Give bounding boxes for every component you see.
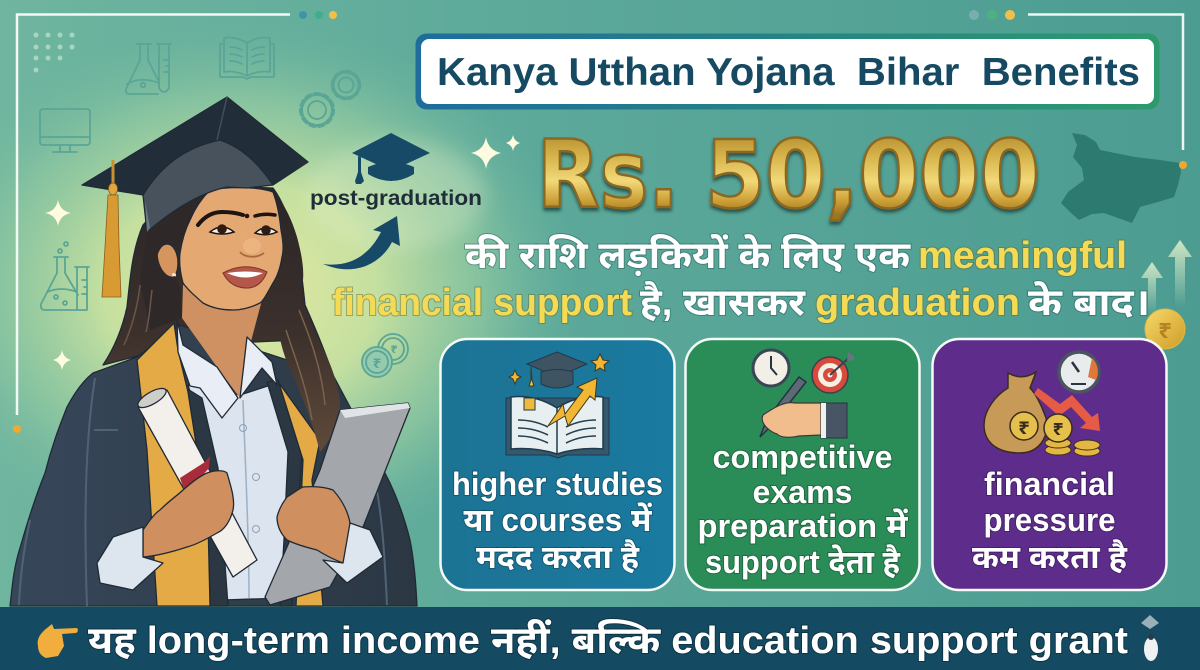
cuff left: [97, 527, 163, 590]
icon: growth arrows: [1141, 240, 1192, 314]
sentence line 1: की राशि लड़कियों के लिए एक: [465, 233, 911, 277]
hand left: [143, 471, 234, 557]
icon: monitor: [40, 109, 90, 152]
face: [180, 188, 283, 310]
post-graduation callout: [306, 133, 486, 269]
right front hair: [273, 190, 340, 452]
card text: support देता है: [705, 544, 901, 580]
neck: [182, 285, 262, 398]
sentence line 2: financial support: [332, 282, 632, 324]
collar left: [177, 320, 238, 418]
amount: Rs. 50,000: [537, 121, 1040, 230]
card text: [972, 466, 1128, 575]
icon: graduate figure: [1141, 615, 1159, 661]
eyes and brows: [198, 212, 243, 225]
card text: कम करता है: [972, 539, 1128, 575]
sentence line 2: है, खासकर: [640, 280, 806, 324]
decorative frame: top right: [969, 10, 1187, 169]
sentence line 1: [465, 233, 1127, 277]
card text: exams: [752, 474, 852, 510]
icon: graduation cap: [352, 133, 430, 184]
buttons: [240, 424, 246, 432]
shirt: [188, 383, 300, 600]
sentence line 2: graduation: [815, 282, 1020, 324]
card text: financial: [984, 466, 1115, 502]
card text: मदद करता है: [476, 539, 640, 575]
icon: flask and test tube, lower: [41, 242, 89, 310]
cap board: [82, 97, 308, 195]
title box: Kanya Utthan Yojana Bihar Benefits: [437, 51, 1140, 94]
gown: [10, 325, 417, 606]
sentence line 2: के बाद।: [1028, 280, 1150, 324]
card text: pressure: [984, 502, 1116, 538]
stole left: [137, 323, 210, 606]
cuff right: [323, 523, 383, 583]
panel: higher studies: [440, 339, 674, 590]
card text: competitive: [712, 439, 892, 475]
title box: [416, 34, 1160, 110]
icon: money bag, gauge and down arrow: ₹: [1018, 417, 1030, 439]
sparkles: [45, 135, 520, 370]
sentence line 2: [332, 280, 1150, 324]
amount: Rs. 50,000: 50,000: [705, 121, 1040, 230]
inner gown facing left: [186, 388, 228, 606]
icon: clock, target and writing hand: [753, 350, 854, 438]
back hair: [103, 186, 340, 450]
icon: open book, top: [220, 38, 274, 79]
icon: Bihar map: [1061, 133, 1181, 223]
icon: pointing hand: [38, 624, 78, 658]
icon: money bag, gauge and down arrow: ₹: [1053, 419, 1063, 440]
icon: flask and test tube, top: [126, 44, 171, 94]
hand right: [277, 487, 350, 563]
card text: [698, 439, 909, 580]
label: post-graduation: post-graduation: [310, 187, 482, 210]
icon: gold rupee coin: ₹: [1158, 317, 1172, 344]
card text: higher studies: [452, 466, 663, 502]
icon: money bag, gauge and down arrow: [984, 352, 1100, 456]
panel: financial pressure: [932, 339, 1166, 590]
card text: preparation में: [698, 508, 909, 544]
bottom banner: [0, 607, 1200, 670]
student illustration: [10, 97, 417, 606]
laptop: [265, 403, 410, 605]
dot grid: [34, 32, 74, 72]
icon: gold rupee coin: [1145, 309, 1185, 349]
card text: [452, 466, 663, 575]
icon: rupee coins outline: ₹: [373, 355, 381, 372]
icon: rupee coins outline: ₹: [391, 342, 398, 356]
panel: competitive exams: [686, 339, 920, 590]
stole right: [279, 383, 323, 606]
diploma: [138, 390, 257, 577]
arrow: upward curve: [323, 216, 400, 269]
banner text: यह long-term income नहीं, बल्कि education support grant: [88, 618, 1128, 662]
icon: rupee coins outline: [362, 334, 408, 377]
tassel: [112, 160, 114, 188]
sentence line 1: meaningful: [918, 235, 1127, 277]
nose and smile: [240, 252, 264, 257]
icon: gears: [301, 72, 360, 126]
amount: Rs. 50,000: Rs.: [537, 121, 679, 230]
inner gown facing right: [267, 380, 302, 606]
ear: [156, 244, 178, 282]
card text: या courses में: [464, 502, 653, 538]
collar right: [240, 337, 277, 398]
cap crown: [143, 140, 273, 232]
icon: book with growth arrow and cap: [506, 352, 609, 458]
left front hair: [140, 188, 213, 330]
decorative frame: top left: [13, 11, 337, 433]
